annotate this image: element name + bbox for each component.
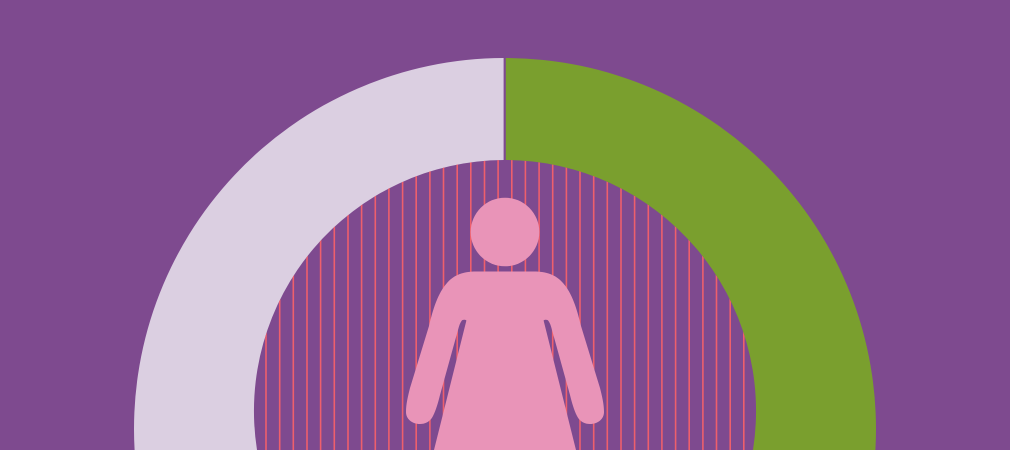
ring segment: light left half bbox=[134, 58, 504, 450]
figure head bbox=[471, 198, 539, 266]
ring segment: green right half bbox=[506, 58, 876, 450]
vertical striped lines inside the circle bbox=[266, 160, 744, 450]
figure body bbox=[406, 272, 604, 450]
icon: female figure bbox=[406, 198, 604, 450]
infographic canvas bbox=[134, 58, 876, 450]
